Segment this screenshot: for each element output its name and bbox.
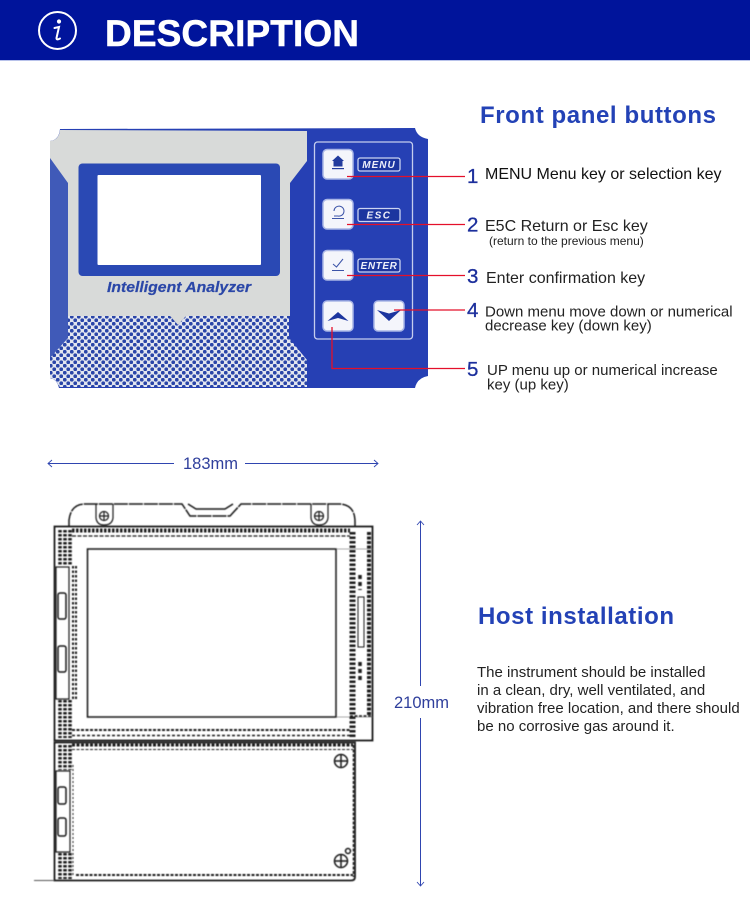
dimension: height (394, 521, 449, 886)
gray faceplate (50, 130, 307, 325)
dimension: width: 183mm (183, 455, 238, 473)
button: enter: ENTER (361, 261, 398, 272)
button: down (374, 301, 404, 331)
installation text (477, 664, 740, 735)
key frame (314, 142, 412, 339)
main frame (54, 526, 372, 740)
button: esc (323, 200, 400, 229)
brand label: Intelligent Analyzer (107, 280, 252, 296)
callout 4: Down menu move down or numerical (485, 304, 733, 320)
right blocks (351, 532, 354, 738)
top tab (69, 504, 355, 526)
button: enter (323, 250, 400, 280)
door screws (334, 754, 348, 768)
callout 4 (467, 299, 733, 334)
callout lines (332, 176, 465, 368)
technical drawing (34, 504, 373, 880)
callout 2: E5C Return or Esc key (485, 218, 648, 235)
left blocks (60, 530, 70, 565)
callout 2 (467, 214, 648, 248)
header title: DESCRIPTION (105, 13, 359, 54)
screen outline (88, 549, 336, 717)
left strip (50, 141, 68, 358)
button: esc: ESC (366, 210, 392, 222)
callout 5: 5 (467, 358, 478, 381)
button: menu: MENU (362, 160, 396, 171)
header banner (0, 0, 750, 61)
callout 5: UP menu up or numerical increase (487, 362, 718, 379)
callout 1 (467, 165, 722, 188)
button: up (323, 301, 353, 331)
callout 5 (467, 358, 718, 394)
callout 1: 1 (467, 165, 478, 188)
dimension: width (48, 455, 378, 473)
callout 3 (467, 265, 645, 288)
callout 1: MENU Menu key or selection key (485, 166, 722, 183)
heading: host installation: Host installation (478, 603, 674, 630)
front panel device (50, 128, 428, 388)
button: menu (323, 150, 400, 179)
installation text: in a clean, dry, well ventilated, and (477, 682, 705, 699)
callout 3: 3 (467, 265, 478, 288)
callout 4: decrease key (down key) (485, 318, 652, 334)
callout 2: 2 (467, 214, 478, 236)
callout 2: (return to the previous menu) (489, 234, 644, 248)
dimension: height: 210mm (394, 694, 449, 712)
screw top left (96, 504, 113, 525)
heading: front panel buttons: Front panel buttons (480, 102, 716, 129)
screw top right (311, 504, 328, 525)
dotted lower area (50, 316, 307, 387)
screen (78, 164, 280, 276)
lower door (54, 742, 355, 880)
callout 5: key (up key) (487, 376, 569, 394)
installation text: be no corrosive gas around it. (477, 718, 675, 735)
icon: info (39, 12, 76, 49)
installation text: The instrument should be installed (477, 664, 705, 681)
installation text: vibration free location, and there should (477, 700, 740, 717)
callout 4: 4 (467, 299, 478, 322)
callout 3: Enter confirmation key (486, 270, 645, 287)
